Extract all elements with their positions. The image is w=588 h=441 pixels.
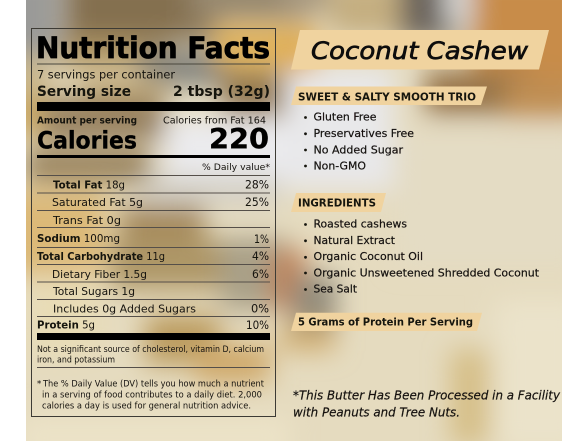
section heading: ingredients	[291, 193, 386, 212]
row: dietary fiber: 6%	[252, 267, 269, 281]
panel: product information	[291, 30, 561, 420]
row: total carbohydrate	[37, 249, 269, 263]
section heading: sweet and salty smooth trio: SWEET & SALTY SMOOTH TRIO	[298, 90, 476, 103]
calories row	[37, 122, 269, 155]
servings per container: 7 servings per container	[37, 68, 175, 82]
allergen note	[293, 388, 561, 420]
allergen note: *This Butter Has Been Processed in a Facility	[293, 388, 561, 402]
calories row: Calories	[37, 126, 137, 154]
daily value footnote: *	[37, 380, 41, 390]
allergen note: with Peanuts and Tree Nuts.	[293, 406, 460, 420]
daily value footnote	[37, 380, 265, 412]
row: added sugars: Includes 0g Added Sugars	[53, 302, 196, 316]
calories row: 220	[209, 122, 269, 155]
row: total sugars: Total Sugars 1g	[52, 285, 135, 298]
amount per serving row: Calories from Fat 164	[163, 116, 266, 126]
panel: nutrition facts label	[32, 28, 276, 416]
nutrient disclaimer	[37, 345, 264, 366]
row: total fat: 28%	[245, 178, 269, 192]
serving size row: 2 tbsp (32g)	[173, 84, 270, 100]
row: sodium: Sodium 100mg	[37, 232, 120, 245]
ingredients list	[304, 218, 540, 296]
row: protein: 10%	[246, 318, 269, 332]
benefits list: No Added Sugar	[314, 143, 403, 156]
ingredients list: Organic Coconut Oil	[314, 250, 423, 263]
nutrient disclaimer: iron, and potassium	[37, 356, 115, 366]
ingredients list: Roasted cashews	[314, 218, 407, 231]
benefits list: Gluten Free	[314, 111, 377, 124]
row: protein	[37, 318, 269, 332]
serving size row	[37, 84, 270, 100]
row: total fat: Total Fat 18g	[53, 178, 125, 192]
benefits list: Non-GMO	[314, 160, 366, 173]
row: protein: Protein 5g	[37, 318, 95, 332]
text softening wrapper	[32, 28, 561, 420]
row: dietary fiber: Dietary Fiber 1.5g	[52, 268, 147, 281]
heading: Nutrition Facts: Nutrition Facts	[36, 31, 270, 65]
title banner: Coconut Cashew	[291, 30, 549, 70]
row: added sugars: 0%	[251, 302, 269, 316]
ingredients list: Organic Unsweetened Shredded Coconut	[314, 267, 540, 280]
ingredients list: Natural Extract	[314, 234, 396, 247]
daily value footnote: calories a day is used for general nutrition advice.	[42, 402, 251, 412]
row: total carbohydrate: Total Carbohydrate 11g	[37, 250, 165, 263]
benefits list: Preservatives Free	[314, 127, 414, 140]
daily value footnote: The % Daily Value (DV) tells you how much a nutrient	[42, 380, 265, 390]
section heading: sweet and salty smooth trio	[291, 86, 487, 105]
nutrient disclaimer: Not a significant source of cholesterol, vitamin D, calcium	[37, 345, 264, 355]
benefits list	[304, 111, 414, 173]
row: saturated fat: 25%	[245, 195, 269, 209]
callout: protein per serving: 5 Grams of Protein Per Serving	[298, 315, 473, 328]
section heading: ingredients: INGREDIENTS	[298, 196, 376, 210]
row: dietary fiber	[52, 267, 269, 281]
row: trans fat: Trans Fat 0g	[52, 214, 121, 227]
row: added sugars	[53, 302, 269, 316]
ingredients list: Sea Salt	[314, 283, 358, 296]
callout: protein per serving	[291, 313, 482, 331]
serving size row: Serving size	[37, 84, 131, 100]
amount per serving row: Amount per serving	[37, 116, 137, 126]
title banner: Coconut Cashew: Coconut Cashew	[311, 37, 528, 65]
row: saturated fat	[52, 195, 269, 209]
amount per serving row	[37, 116, 266, 126]
row: sodium	[37, 232, 269, 246]
row: total carbohydrate: 4%	[252, 249, 269, 263]
row: sodium: 1%	[254, 232, 269, 246]
daily value footnote: in a serving of food contributes to a daily diet. 2,000	[42, 390, 262, 400]
row: total fat	[53, 178, 269, 192]
row: saturated fat: Saturated Fat 5g	[52, 196, 143, 209]
daily value header: % Daily value*	[202, 163, 271, 173]
